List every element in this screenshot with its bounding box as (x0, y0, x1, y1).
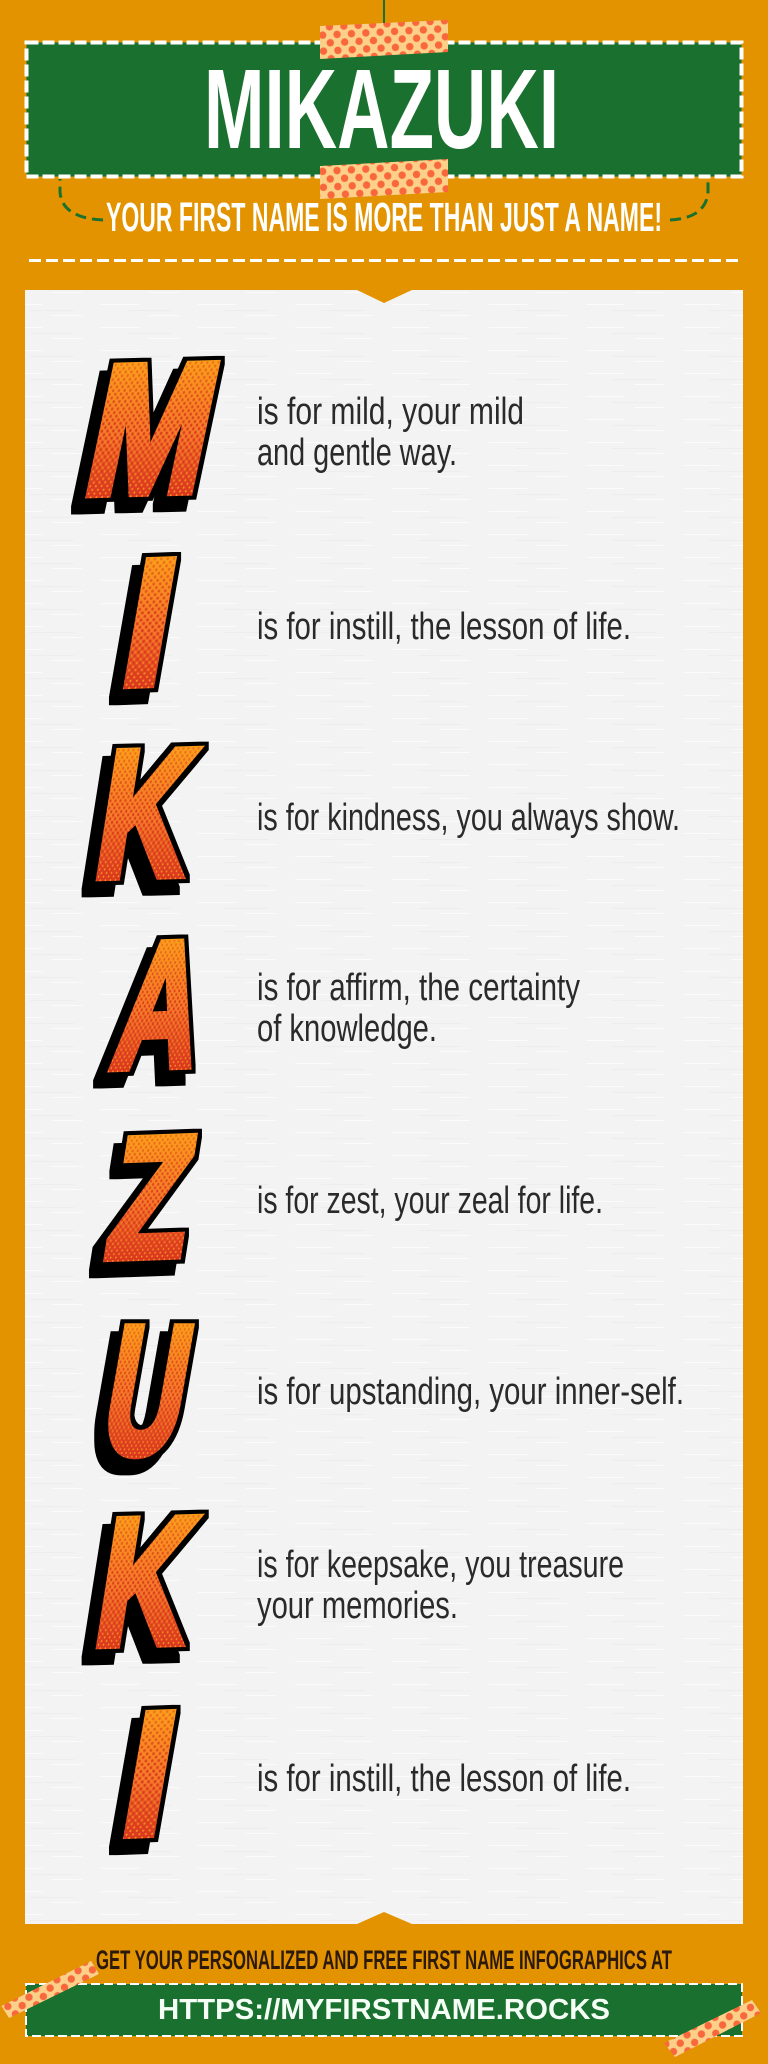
text: I: is for instill, the lesson of life. (257, 606, 631, 648)
row: U (91, 1289, 684, 1493)
row: A (102, 905, 580, 1107)
text: M: is for mild, your mild (257, 391, 524, 433)
text: K second (257, 1544, 624, 1627)
text: A: of knowledge. (257, 1008, 437, 1050)
row: I second (110, 1675, 631, 1872)
row: K second (85, 1480, 624, 1684)
row: Z (97, 1100, 603, 1295)
tape: bottom (320, 159, 448, 199)
text: A (257, 967, 580, 1050)
bracket: right (670, 179, 708, 220)
row: I (110, 522, 631, 724)
bracket: left (60, 179, 103, 220)
tape: top (320, 20, 448, 59)
text: M: and gentle way. (257, 432, 457, 474)
text: M (257, 391, 524, 474)
tape: footer right (664, 2000, 761, 2057)
letter K second: K (85, 1480, 207, 1684)
text: Z: is for zest, your zeal for life. (257, 1180, 603, 1222)
title: MIKAZUKI (204, 46, 559, 172)
letter U: U (91, 1289, 205, 1493)
letter K: K (85, 712, 207, 916)
row: K (85, 712, 680, 916)
text: K second: is for keepsake, you treasure (257, 1544, 624, 1586)
text: A: is for affirm, the certainty (257, 967, 580, 1009)
row: M (72, 326, 524, 534)
main panel (25, 290, 743, 1924)
letter Z: Z (97, 1100, 206, 1295)
url: HTTPS://MYFIRSTNAME.ROCKS (158, 1994, 610, 2026)
letter I: I (110, 522, 190, 724)
text: I second: is for instill, the lesson of life. (257, 1758, 631, 1800)
text: K second: your memories. (257, 1585, 458, 1627)
footer banner (26, 1984, 742, 2036)
title banner (26, 42, 742, 176)
header hanging line (383, 0, 385, 24)
letter M: M (72, 326, 234, 534)
letter A: A (102, 905, 219, 1107)
tape: footer left (2, 1961, 99, 2018)
letter I second: I (110, 1675, 189, 1872)
